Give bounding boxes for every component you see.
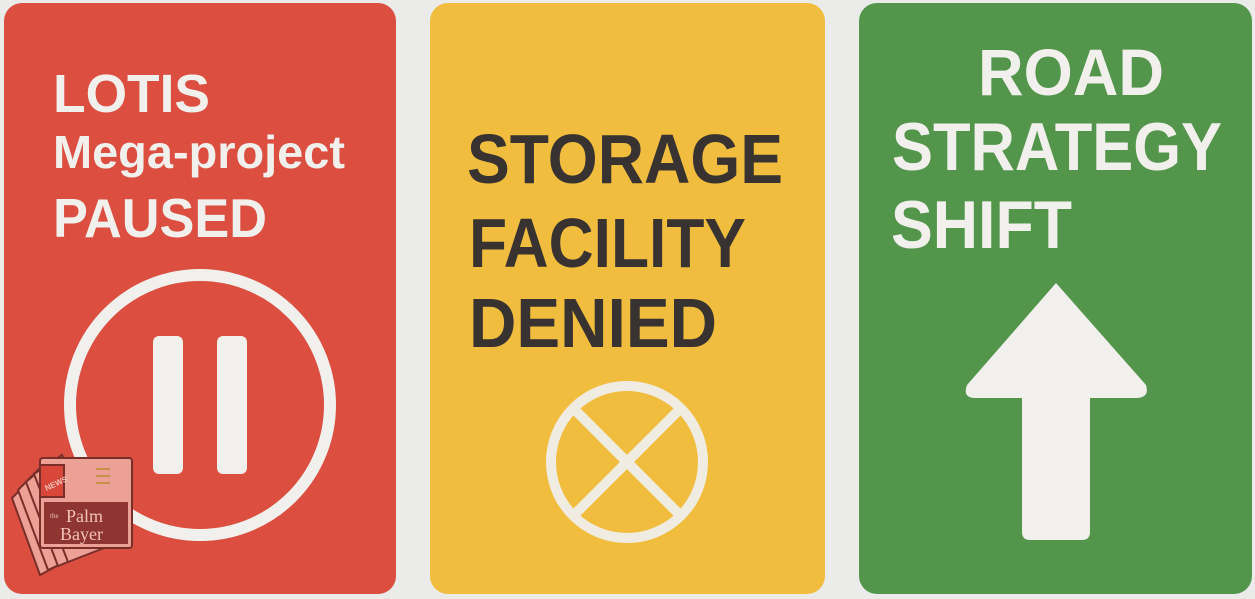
heading: ROAD STRATEGY SHIFT: SHIFT	[891, 187, 1072, 263]
heading: LOTIS Mega-project PAUSED: LOTIS	[53, 64, 210, 124]
panel: LOTIS paused	[4, 3, 396, 594]
panel: storage facility denied	[430, 3, 825, 594]
logo: the Palm Bayer: NEWS	[43, 474, 70, 493]
logo: the Palm Bayer: Bayer	[60, 524, 103, 544]
heading: STORAGE FACILITY DENIED: DENIED	[469, 284, 717, 362]
logo: the Palm Bayer: Palm	[66, 506, 103, 526]
heading: STORAGE FACILITY DENIED: FACILITY	[469, 204, 746, 282]
heading: LOTIS Mega-project PAUSED: Mega-project	[53, 126, 345, 178]
heading: STORAGE FACILITY DENIED	[467, 120, 783, 362]
panel: road strategy shift	[859, 3, 1252, 594]
heading: ROAD STRATEGY SHIFT: STRATEGY	[892, 109, 1222, 185]
heading: ROAD STRATEGY SHIFT: ROAD	[978, 35, 1164, 109]
heading: LOTIS Mega-project PAUSED	[53, 64, 345, 249]
heading: ROAD STRATEGY SHIFT	[891, 35, 1222, 263]
logo: the Palm Bayer	[12, 455, 132, 575]
logo: the Palm Bayer: the	[50, 512, 59, 520]
heading: STORAGE FACILITY DENIED: STORAGE	[467, 120, 783, 198]
icon: up arrow	[966, 283, 1147, 540]
heading: LOTIS Mega-project PAUSED: PAUSED	[53, 187, 267, 249]
icon: X circle	[551, 386, 703, 538]
icon: pause circle	[70, 275, 330, 535]
